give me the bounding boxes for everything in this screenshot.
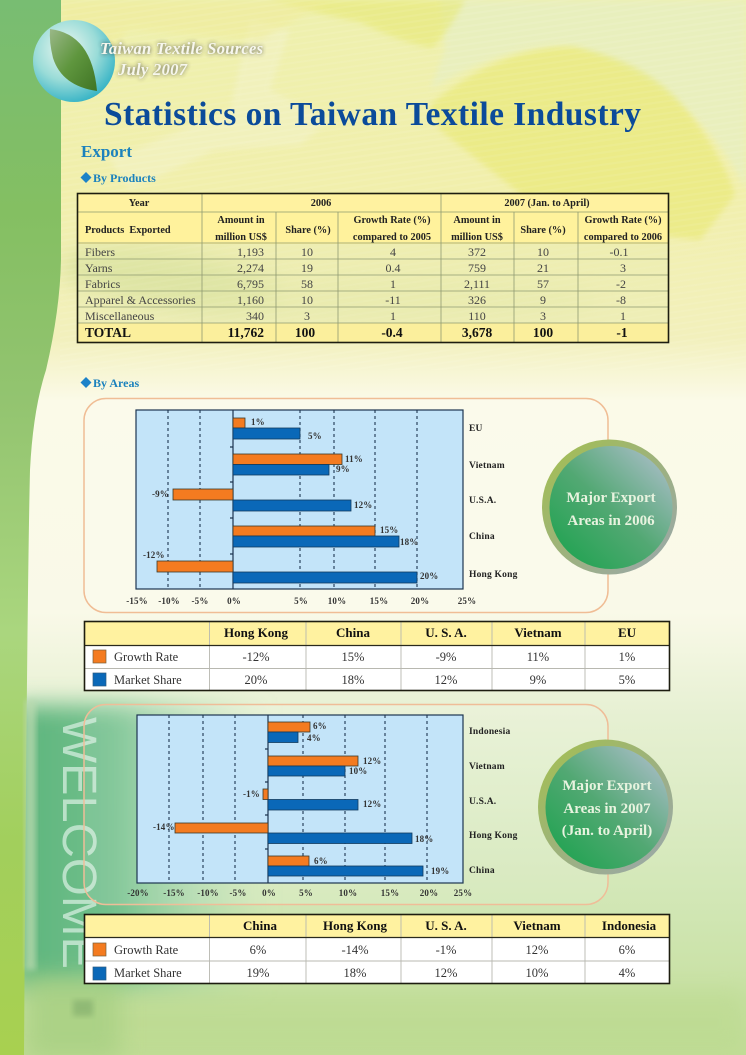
bar chart: 2006: EU <box>469 424 483 434</box>
bar chart: 2006: -9% <box>152 489 169 499</box>
row: Yarns: 759 <box>468 261 486 275</box>
row: Growth Rate: Growth Rate <box>114 650 179 664</box>
row: Market Share: 10% <box>526 966 548 980</box>
bar chart: 2006: -10% <box>158 596 180 606</box>
row: Growth Rate: Growth Rate <box>114 943 179 957</box>
bar chart: 2006: 5% <box>308 431 322 441</box>
table header <box>224 625 637 640</box>
row: Miscellaneous <box>85 309 626 323</box>
bar chart: 2007: U.S.A. <box>469 797 496 807</box>
issue label: July 2007 <box>117 60 188 79</box>
bar chart: 2007: -20% <box>127 888 149 898</box>
row: Apparel & Accessories: 1,160 <box>237 293 264 307</box>
table: 2006 areas <box>84 622 670 690</box>
bar chart: 2007: -14% <box>153 822 175 832</box>
row: Apparel & Accessories: Apparel & Accessories <box>85 293 196 307</box>
row: Growth Rate <box>93 650 635 664</box>
bar chart: 2007: -15% <box>163 888 185 898</box>
bar chart: 2006: 20% <box>420 571 438 581</box>
row: Growth Rate: 12% <box>526 943 548 957</box>
row: Fibers: 1,193 <box>237 245 264 259</box>
row: TOTAL: 100 <box>295 325 315 340</box>
table header <box>85 198 662 243</box>
table header: Indonesia <box>602 918 657 933</box>
bar chart: 2006: -5% <box>192 596 208 606</box>
table: 2007 areas <box>84 914 670 984</box>
table header: million US$ <box>451 232 503 243</box>
row: Miscellaneous: 3 <box>540 309 546 323</box>
row: TOTAL: -0.4 <box>381 325 403 340</box>
row: Growth Rate: 11% <box>527 650 549 664</box>
bar chart: 2006: China <box>469 532 495 542</box>
bar chart: 2006: 15% <box>370 596 388 606</box>
bar chart: 2007: 4% <box>307 733 321 743</box>
row: Yarns: 21 <box>537 261 549 275</box>
table header: Share (%) <box>520 225 566 236</box>
row: Growth Rate: -9% <box>436 650 456 664</box>
issue label: Taiwan Textile Sources <box>100 39 263 58</box>
bar chart: 2007: 0% <box>262 888 276 898</box>
table header: U. S. A. <box>425 918 467 933</box>
table header: Vietnam <box>514 625 562 640</box>
row: Fibers: -0.1 <box>610 245 628 259</box>
heading: By Products: By Products <box>93 171 156 185</box>
badge: Major Export Areas in 2007: (Jan. to April) <box>562 823 652 839</box>
row: TOTAL: 11,762 <box>228 325 264 340</box>
table header: 2007 (Jan. to April) <box>504 198 590 209</box>
row: Fabrics: 1 <box>390 277 396 291</box>
bar chart: 2006: 1% <box>251 417 265 427</box>
row: Market Share: 20% <box>245 673 267 687</box>
bar chart: 2006: 0% <box>227 596 241 606</box>
row: TOTAL: 3,678 <box>462 325 492 340</box>
bar chart: 2007: 10% <box>339 888 357 898</box>
bar chart: 2007: -10% <box>197 888 219 898</box>
row: Growth Rate: 1% <box>619 650 635 664</box>
bar chart: 2006: 10% <box>328 596 346 606</box>
bar chart: 2007: 10% <box>349 766 367 776</box>
bar chart: 2007: 20% <box>420 888 438 898</box>
table header: Hong Kong <box>224 625 288 640</box>
row: Yarns: Yarns <box>85 261 113 275</box>
decorative WELCOME lettering: WELCOME <box>52 717 105 969</box>
table header: Share (%) <box>285 225 331 236</box>
row: Fabrics: 57 <box>537 277 549 291</box>
table header: Growth Rate (%) <box>584 215 662 226</box>
row: Market Share: 12% <box>435 966 457 980</box>
bar chart: 2006: 15% <box>380 525 398 535</box>
row: Market Share: 12% <box>435 673 457 687</box>
row: Market Share <box>93 966 635 980</box>
row: Growth Rate <box>93 943 635 957</box>
bar chart: 2007: Vietnam <box>469 762 505 772</box>
row: TOTAL: -1 <box>616 325 628 340</box>
bar chart: 2007: 12% <box>363 799 381 809</box>
bar chart: 2006: U.S.A. <box>469 496 496 506</box>
row: TOTAL <box>85 325 628 340</box>
row: Apparel & Accessories: -8 <box>616 293 626 307</box>
row: Growth Rate: 15% <box>342 650 364 664</box>
title: Statistics on Taiwan Textile Industry <box>104 96 641 133</box>
row: Market Share: Market Share <box>114 673 182 687</box>
row: Market Share: 18% <box>344 966 366 980</box>
panel: major export areas 2007 <box>84 704 673 904</box>
badge: Major Export Areas in 2006 <box>542 440 677 574</box>
bar chart: 2007: China <box>469 866 495 876</box>
row: TOTAL: 100 <box>533 325 553 340</box>
table header: Growth Rate (%) <box>353 215 431 226</box>
row: Growth Rate: -12% <box>242 650 270 664</box>
bar chart: 2006: 12% <box>354 500 372 510</box>
table header: Vietnam <box>513 918 561 933</box>
bar chart: 2007: 25% <box>454 888 472 898</box>
row: Market Share: 4% <box>619 966 635 980</box>
row: Apparel & Accessories: -11 <box>385 293 401 307</box>
bar chart: 2007: -1% <box>243 789 260 799</box>
row: Market Share: 19% <box>247 966 269 980</box>
row: Fibers: 10 <box>537 245 549 259</box>
table: exports by product <box>78 193 668 342</box>
bar chart: 2007: Indonesia <box>469 727 510 737</box>
table header: Products Exported <box>85 225 171 236</box>
row: Miscellaneous: 3 <box>304 309 310 323</box>
table header: million US$ <box>215 232 267 243</box>
row: Miscellaneous: 1 <box>390 309 396 323</box>
bar chart: 2007: 18% <box>415 834 433 844</box>
issue label: July 2007 <box>117 60 188 79</box>
row: Fabrics <box>85 277 626 291</box>
row: Fabrics: 58 <box>301 277 313 291</box>
row: Fibers: 10 <box>301 245 313 259</box>
row: Fibers: 4 <box>390 245 396 259</box>
row: Yarns: 19 <box>301 261 313 275</box>
row: Growth Rate: -1% <box>436 943 456 957</box>
table header: compared to 2006 <box>584 232 662 243</box>
badge: Major Export Areas in 2007: Major Export <box>562 778 652 794</box>
bar chart: 2006: 20% <box>411 596 429 606</box>
bar chart: 2007: 15% <box>381 888 399 898</box>
bar chart: 2007: 19% <box>431 866 449 876</box>
bar chart: 2006: Hong Kong <box>469 570 518 580</box>
heading: By Areas: By Areas <box>93 376 139 390</box>
row: Fibers <box>85 245 628 259</box>
table header: U. S. A. <box>425 625 467 640</box>
row: Fibers: Fibers <box>85 245 115 259</box>
row: Market Share: 9% <box>530 673 546 687</box>
row: Yarns: 3 <box>620 261 626 275</box>
table header: Year <box>129 198 150 209</box>
row: Growth Rate: 6% <box>619 943 635 957</box>
row: Market Share: 5% <box>619 673 635 687</box>
bar chart: 2006: 25% <box>458 596 476 606</box>
row: Fibers: 372 <box>468 245 486 259</box>
bar chart: 2006 <box>126 410 518 606</box>
issue label <box>100 39 263 79</box>
row: TOTAL: TOTAL <box>85 325 131 340</box>
row: Apparel & Accessories <box>85 293 626 307</box>
table header: China <box>243 918 277 933</box>
row: Miscellaneous: 340 <box>246 309 264 323</box>
row: Fabrics: 6,795 <box>237 277 264 291</box>
icon: leaf bubble <box>33 20 115 102</box>
row: Market Share: Market Share <box>114 966 182 980</box>
bar chart: 2007: -5% <box>230 888 246 898</box>
badge: Major Export Areas in 2007: Areas in 2007 <box>563 801 651 817</box>
bar chart: 2007: 6% <box>314 856 328 866</box>
row: Fabrics: Fabrics <box>85 277 121 291</box>
row: Yarns: 0.4 <box>386 261 400 275</box>
bar chart: 2006: -12% <box>143 550 165 560</box>
table header: compared to 2005 <box>353 232 431 243</box>
table header <box>243 918 657 933</box>
table header: EU <box>618 625 637 640</box>
row: Yarns <box>85 261 626 275</box>
table header: Amount in <box>453 215 501 226</box>
bar chart: 2007: 5% <box>299 888 313 898</box>
row: Apparel & Accessories: 9 <box>540 293 546 307</box>
issue label: Taiwan Textile Sources <box>100 39 263 58</box>
table header: 2006 <box>311 198 331 209</box>
row: Market Share: 18% <box>342 673 364 687</box>
bar chart: 2006: Vietnam <box>469 461 505 471</box>
bar chart: 2007 <box>127 715 518 898</box>
table header: Hong Kong <box>323 918 387 933</box>
bar chart: 2006: 5% <box>294 596 308 606</box>
row: Market Share <box>93 673 635 687</box>
row: Yarns: 2,274 <box>237 261 264 275</box>
table header: Amount in <box>217 215 265 226</box>
row: Miscellaneous: 1 <box>620 309 626 323</box>
heading: Export: Export <box>81 142 132 161</box>
bar chart: 2006: 11% <box>345 454 363 464</box>
badge: Major Export Areas in 2006: Areas in 2006 <box>567 513 655 529</box>
bar chart: 2007: 6% <box>313 721 327 731</box>
row: Fabrics: -2 <box>616 277 626 291</box>
bar chart: 2006: 9% <box>336 464 350 474</box>
row: Apparel & Accessories: 10 <box>301 293 313 307</box>
row: Apparel & Accessories: 326 <box>468 293 486 307</box>
row: Fabrics: 2,111 <box>464 277 490 291</box>
badge: Major Export Areas in 2007 <box>538 740 673 874</box>
panel: major export areas 2006 <box>84 398 677 612</box>
badge: Major Export Areas in 2006: Major Export <box>566 490 656 506</box>
row: Growth Rate: -14% <box>341 943 369 957</box>
bar chart: 2006: 18% <box>400 537 418 547</box>
row: Miscellaneous: 110 <box>468 309 486 323</box>
table header: China <box>336 625 370 640</box>
row: Growth Rate: 6% <box>250 943 266 957</box>
bar chart: 2007: Hong Kong <box>469 831 518 841</box>
bar chart: 2007: 12% <box>363 756 381 766</box>
logo: leaf in bubble with issue label <box>33 20 263 102</box>
row: Miscellaneous: Miscellaneous <box>85 309 155 323</box>
bar chart: 2006: -15% <box>126 596 148 606</box>
